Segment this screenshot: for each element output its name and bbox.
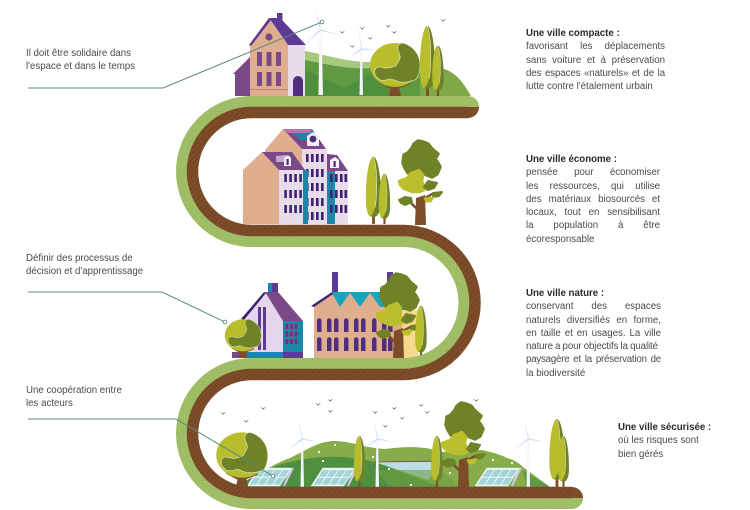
text: left label coopération: les acteurs — [26, 398, 73, 409]
scene: economical city — [243, 129, 442, 225]
winding road — [182, 96, 583, 509]
text: left label processus: décision et d'apprentissage — [26, 266, 143, 277]
connector line: lower label — [28, 419, 275, 478]
icon: poplar tree — [431, 436, 443, 487]
text: une ville nature: nature a pour objectifs la qualité — [526, 341, 658, 352]
text: left label coopération — [26, 385, 122, 409]
icon: small poplar tree — [432, 46, 444, 96]
icon: small poplar tree — [379, 174, 390, 224]
icon: round tree — [370, 43, 420, 96]
icon: solar panel — [311, 468, 358, 486]
icon: small round tree — [225, 319, 261, 358]
scene: nature city — [225, 272, 427, 358]
text: une ville compacte: Une ville compacte : — [526, 28, 620, 39]
text: une ville compacte: sans voiture et à préservation — [526, 55, 665, 66]
icon: poplar tree — [354, 436, 365, 487]
text: une ville sécurisée — [618, 422, 711, 460]
scene: compact city — [233, 6, 471, 96]
icon: small poplar tree — [558, 436, 569, 487]
text: une ville nature: conservant des espaces — [526, 301, 661, 312]
icon: wind turbine — [350, 28, 377, 95]
icon: large tree — [399, 141, 442, 225]
icon: poplar tree — [366, 157, 381, 224]
text: une ville compacte: favorisant les déplacements — [526, 41, 665, 52]
text: left label processus: Définir des processus de — [26, 253, 133, 264]
text: une ville nature — [526, 288, 661, 379]
text: une ville sécurisée: Une ville sécurisée : — [618, 422, 711, 433]
text: une ville compacte — [526, 28, 666, 92]
text: left label processus — [26, 253, 143, 277]
text: une ville nature: Une ville nature : — [526, 288, 604, 299]
icon: wind turbine — [515, 418, 545, 487]
scene: safe city — [216, 399, 569, 487]
text: une ville économe — [526, 154, 660, 245]
hills behind the house — [305, 51, 471, 96]
icon: lavender house — [232, 283, 303, 358]
icon: factory — [311, 272, 418, 358]
text: une ville nature: en taille et en usages. La ville — [526, 328, 661, 339]
text: une ville nature: naturels diversifiés en forme, — [526, 315, 661, 326]
text: left label solidaire — [26, 48, 135, 72]
icon: poplar tree — [415, 306, 427, 358]
text: une ville économe: pensée pour économiser — [526, 167, 660, 178]
icon: large tree — [442, 403, 485, 487]
text: left label solidaire: Il doit être solidaire dans — [26, 48, 131, 59]
icon: solar panel — [475, 468, 522, 486]
icon: birds — [339, 19, 446, 48]
icon: birds — [220, 399, 479, 428]
text: une ville sécurisée: bien gérés — [618, 449, 663, 460]
hills with lake — [233, 441, 550, 487]
icon: house with purple roof — [233, 13, 306, 96]
text: une ville nature: paysagère et la préservation de — [526, 354, 661, 365]
text: left label coopération: Une coopération entre — [26, 385, 122, 396]
text: left label solidaire: l'espace et dans le temps — [26, 61, 135, 72]
text: une ville économe: locaux, tout en sensibilisant — [526, 207, 660, 218]
text: une ville économe: écoresponsable — [526, 234, 594, 245]
icon: large tree — [377, 274, 420, 358]
text: une ville compacte: lutte contre l'étalement urbain — [526, 81, 653, 92]
icon: solar panel — [247, 468, 294, 486]
text: une ville économe: Une ville économe : — [526, 154, 617, 165]
icon: wind turbine — [289, 418, 319, 487]
text: une ville économe: les ressources, qui utilise — [526, 181, 660, 192]
icon: wind turbine — [307, 6, 341, 95]
icon: round tree — [216, 432, 268, 487]
icon: poplar tree — [420, 26, 435, 96]
icon: apartment building — [243, 129, 348, 224]
icon: wind turbine — [364, 418, 394, 487]
text: une ville sécurisée: où les risques sont — [618, 435, 699, 446]
icon: poplar tree — [549, 419, 565, 487]
text: une ville compacte: des espaces «naturels» et de la — [526, 68, 665, 79]
text: une ville nature: la biodiversité — [526, 368, 585, 379]
text: une ville économe: des matériaux biosourcés et — [526, 194, 660, 205]
text: une ville économe: la population à être — [526, 220, 660, 231]
connector line: middle label — [28, 292, 227, 324]
connector line: top label — [28, 20, 324, 88]
